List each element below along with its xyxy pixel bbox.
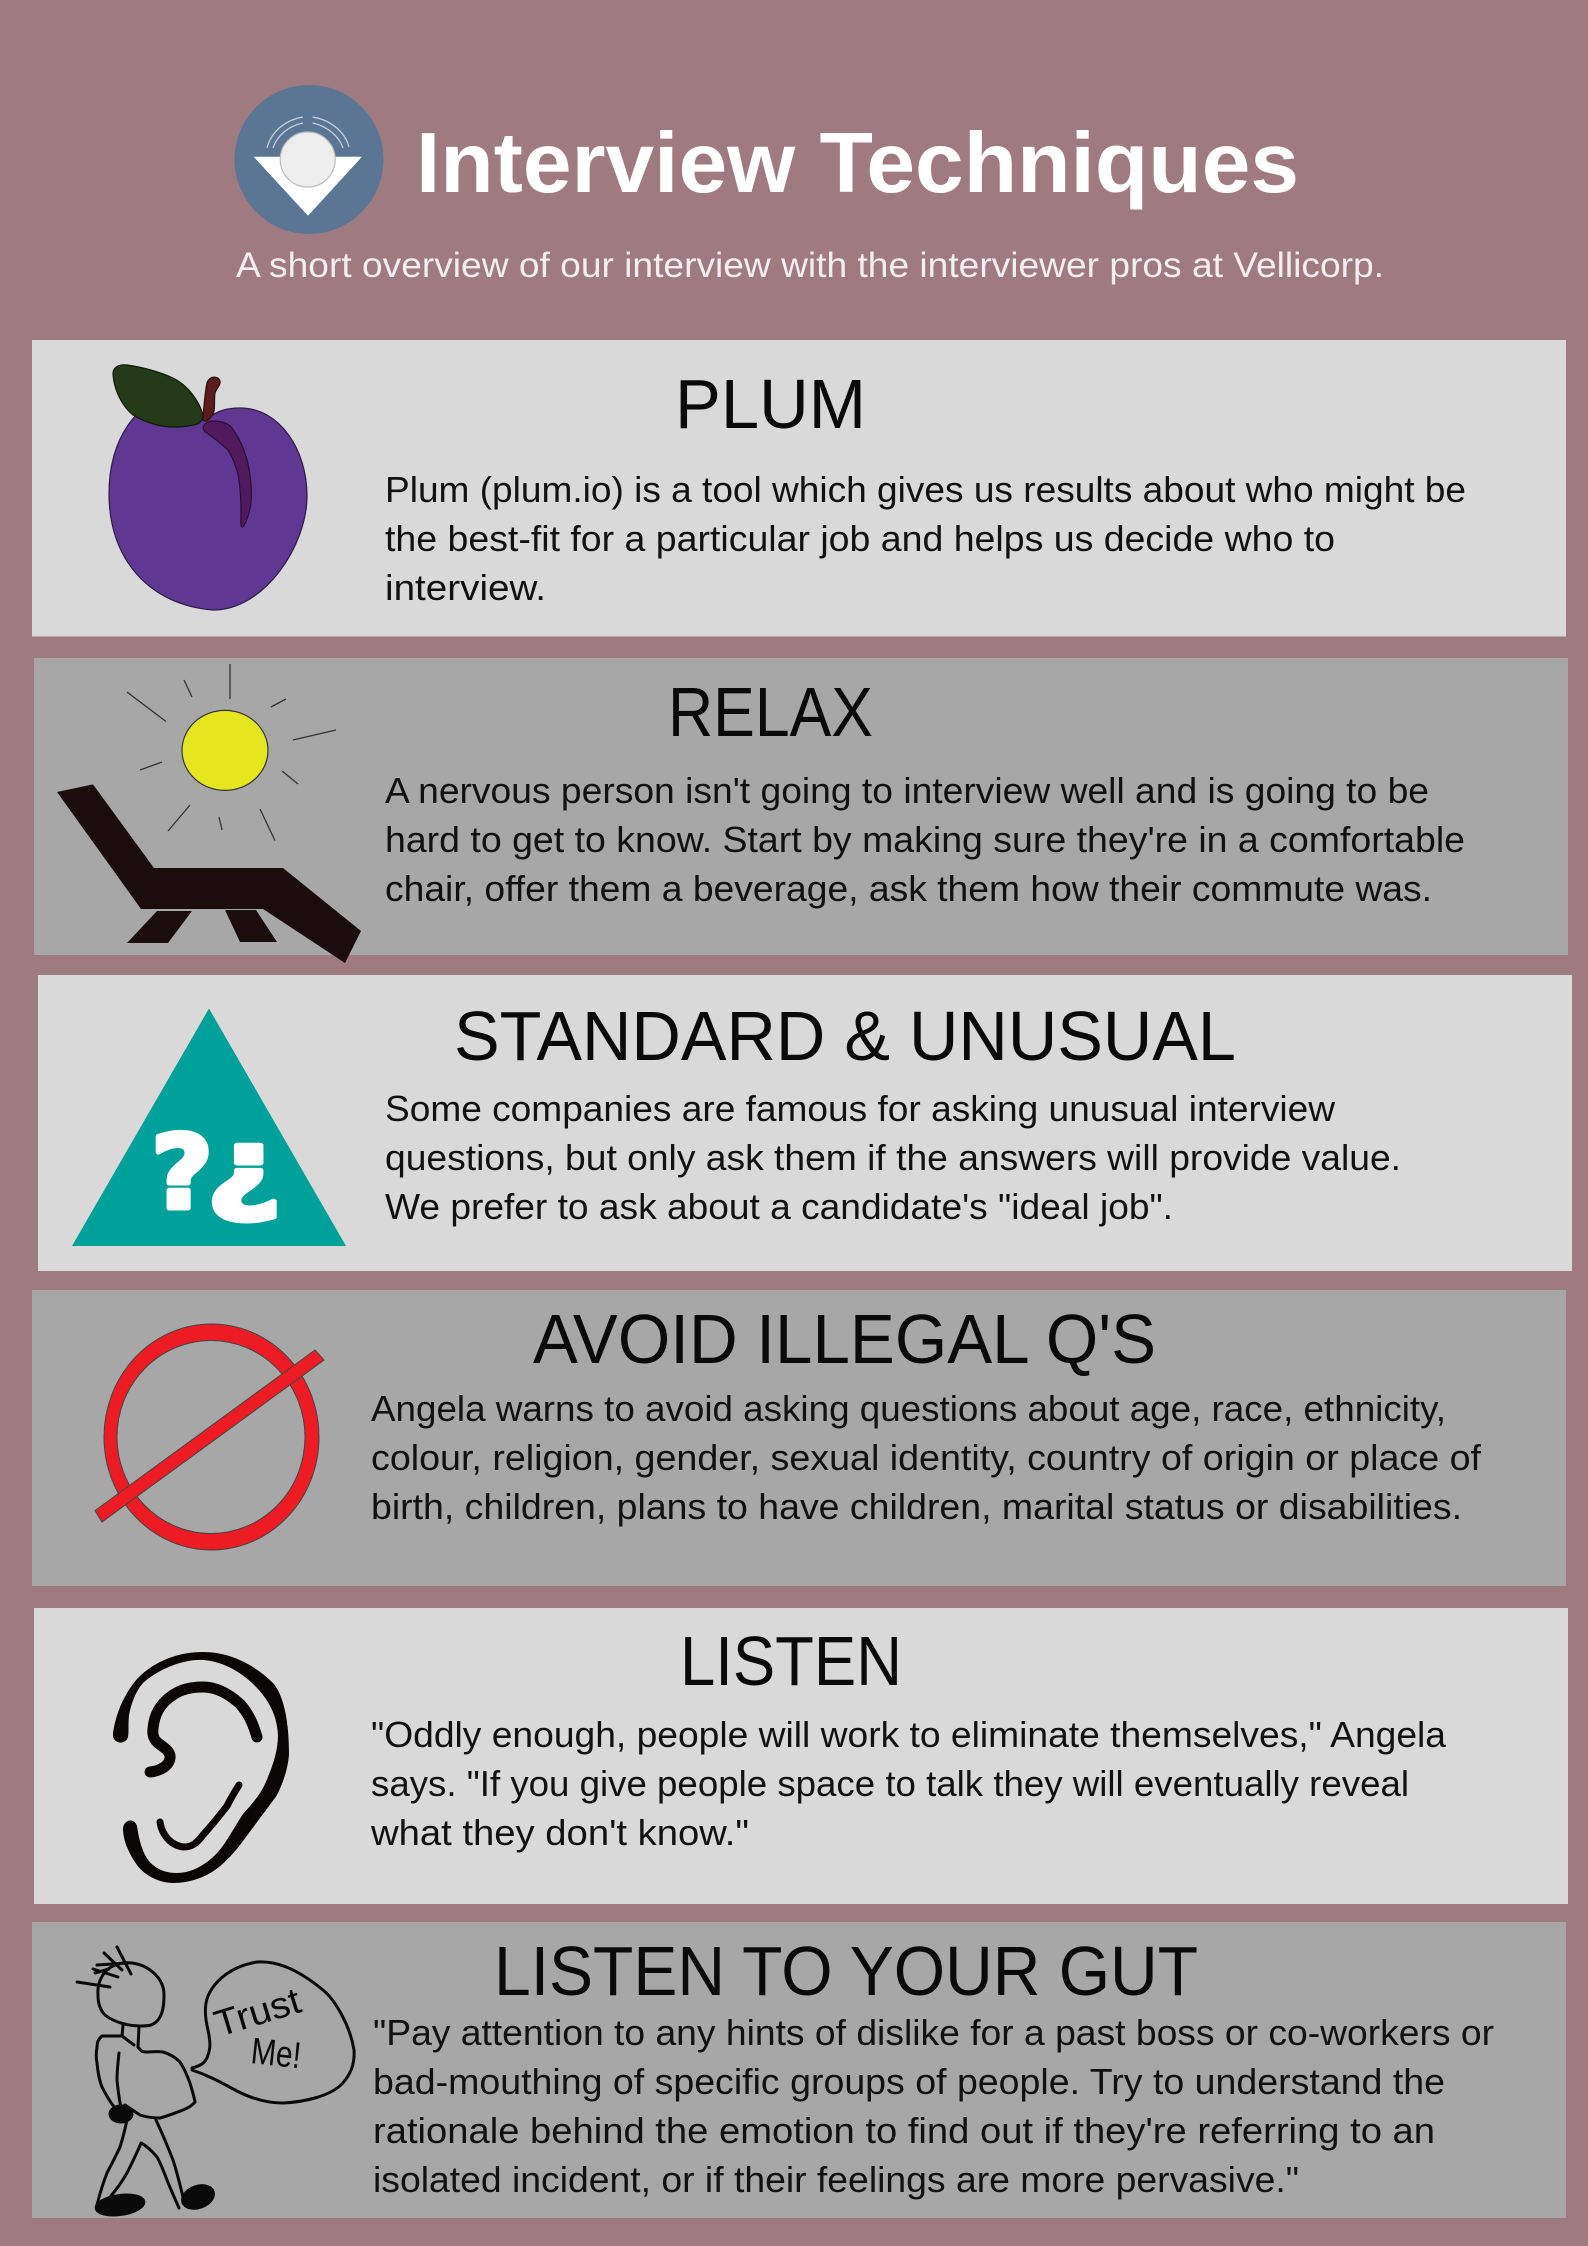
heading: LISTEN TO YOUR GUT: LISTEN TO YOUR GUT: [494, 1932, 1198, 2010]
text: plum body: interview.: [385, 567, 546, 608]
text: gut body: bad-mouthing of specific groups of people. Try to understand the: [373, 2061, 1445, 2102]
icon: ear: [113, 1652, 289, 1883]
text: relax body: hard to get to know. Start by making sure they're in a comfortable: [385, 819, 1465, 860]
icon: plum: [109, 365, 307, 610]
text: plum body: Plum (plum.io) is a tool which gives us results about who might be: [385, 469, 1466, 510]
icon: question triangle: [72, 1008, 346, 1246]
text: gut body: rationale behind the emotion to find out if they're referring to an: [373, 2110, 1435, 2151]
text: listen body: what they don't know.": [370, 1812, 749, 1853]
text: gut body: [373, 2012, 1494, 2200]
heading: PLUM: PLUM: [675, 365, 866, 443]
text: illegal questions body: [371, 1388, 1482, 1527]
subtitle: A short overview of our interview with the interviewer pros at Vellicorp.: [236, 246, 1384, 285]
panel: standard and unusual: [38, 975, 1572, 1271]
text: plum body: [385, 469, 1466, 608]
text: gut body: "Pay attention to any hints of dislike for a past boss or co-workers or: [373, 2012, 1494, 2053]
icon: lounge chair: [57, 784, 361, 963]
text: plum body: the best-fit for a particular job and helps us decide who to: [385, 518, 1335, 559]
text: gut body: isolated incident, or if their feelings are more pervasive.": [373, 2159, 1299, 2200]
text: listen body: [370, 1714, 1447, 1853]
heading: STANDARD & UNUSUAL: STANDARD & UNUSUAL: [454, 997, 1236, 1075]
text: illegal questions body: Angela warns to avoid asking questions about age, race, ethnicity,: [371, 1388, 1446, 1429]
icon: person with speech bubble: [77, 1947, 354, 2218]
text: standard body: [385, 1088, 1401, 1227]
panel: listen to your gut: [32, 1922, 1566, 2218]
icon: question triangle: ?: [151, 1114, 213, 1233]
title: Interview Techniques: [416, 116, 1299, 211]
header: [234, 85, 1384, 285]
text: listen body: "Oddly enough, people will work to eliminate themselves," Angela: [371, 1714, 1447, 1755]
heading: AVOID ILLEGAL Q'S: AVOID ILLEGAL Q'S: [533, 1300, 1156, 1378]
logo: Vellicorp: [234, 85, 384, 234]
panel: avoid illegal questions: [32, 1290, 1566, 1586]
text: relax body: chair, offer them a beverage, ask them how their commute was.: [385, 868, 1432, 909]
heading: RELAX: RELAX: [668, 673, 873, 751]
heading: LISTEN: LISTEN: [680, 1622, 902, 1700]
text: standard body: questions, but only ask them if the answers will provide value.: [385, 1137, 1401, 1178]
panel: listen: [34, 1608, 1568, 1904]
text: illegal questions body: birth, children, plans to have children, marital status or disabilities.: [371, 1486, 1462, 1527]
text: Trust Me!: [209, 1979, 306, 2076]
text: relax body: A nervous person isn't going to interview well and is going to be: [385, 770, 1429, 811]
text: relax body: [385, 770, 1465, 909]
panel: relax: [34, 658, 1568, 963]
text: standard body: We prefer to ask about a candidate's "ideal job".: [385, 1186, 1173, 1227]
text: Trust Me!: Trust: [209, 1979, 306, 2045]
panel: plum: [32, 340, 1566, 636]
text: Trust Me!: Me!: [249, 2030, 303, 2076]
icon: sun: [127, 664, 336, 841]
text: standard body: Some companies are famous for asking unusual interview: [385, 1088, 1336, 1129]
icon: prohibition sign: [95, 1324, 324, 1550]
icon: question triangle: ¿: [206, 1107, 282, 1226]
text: illegal questions body: colour, religion, gender, sexual identity, country of origin or place of: [371, 1437, 1482, 1478]
text: listen body: says. "If you give people space to talk they will eventually reveal: [371, 1763, 1409, 1804]
